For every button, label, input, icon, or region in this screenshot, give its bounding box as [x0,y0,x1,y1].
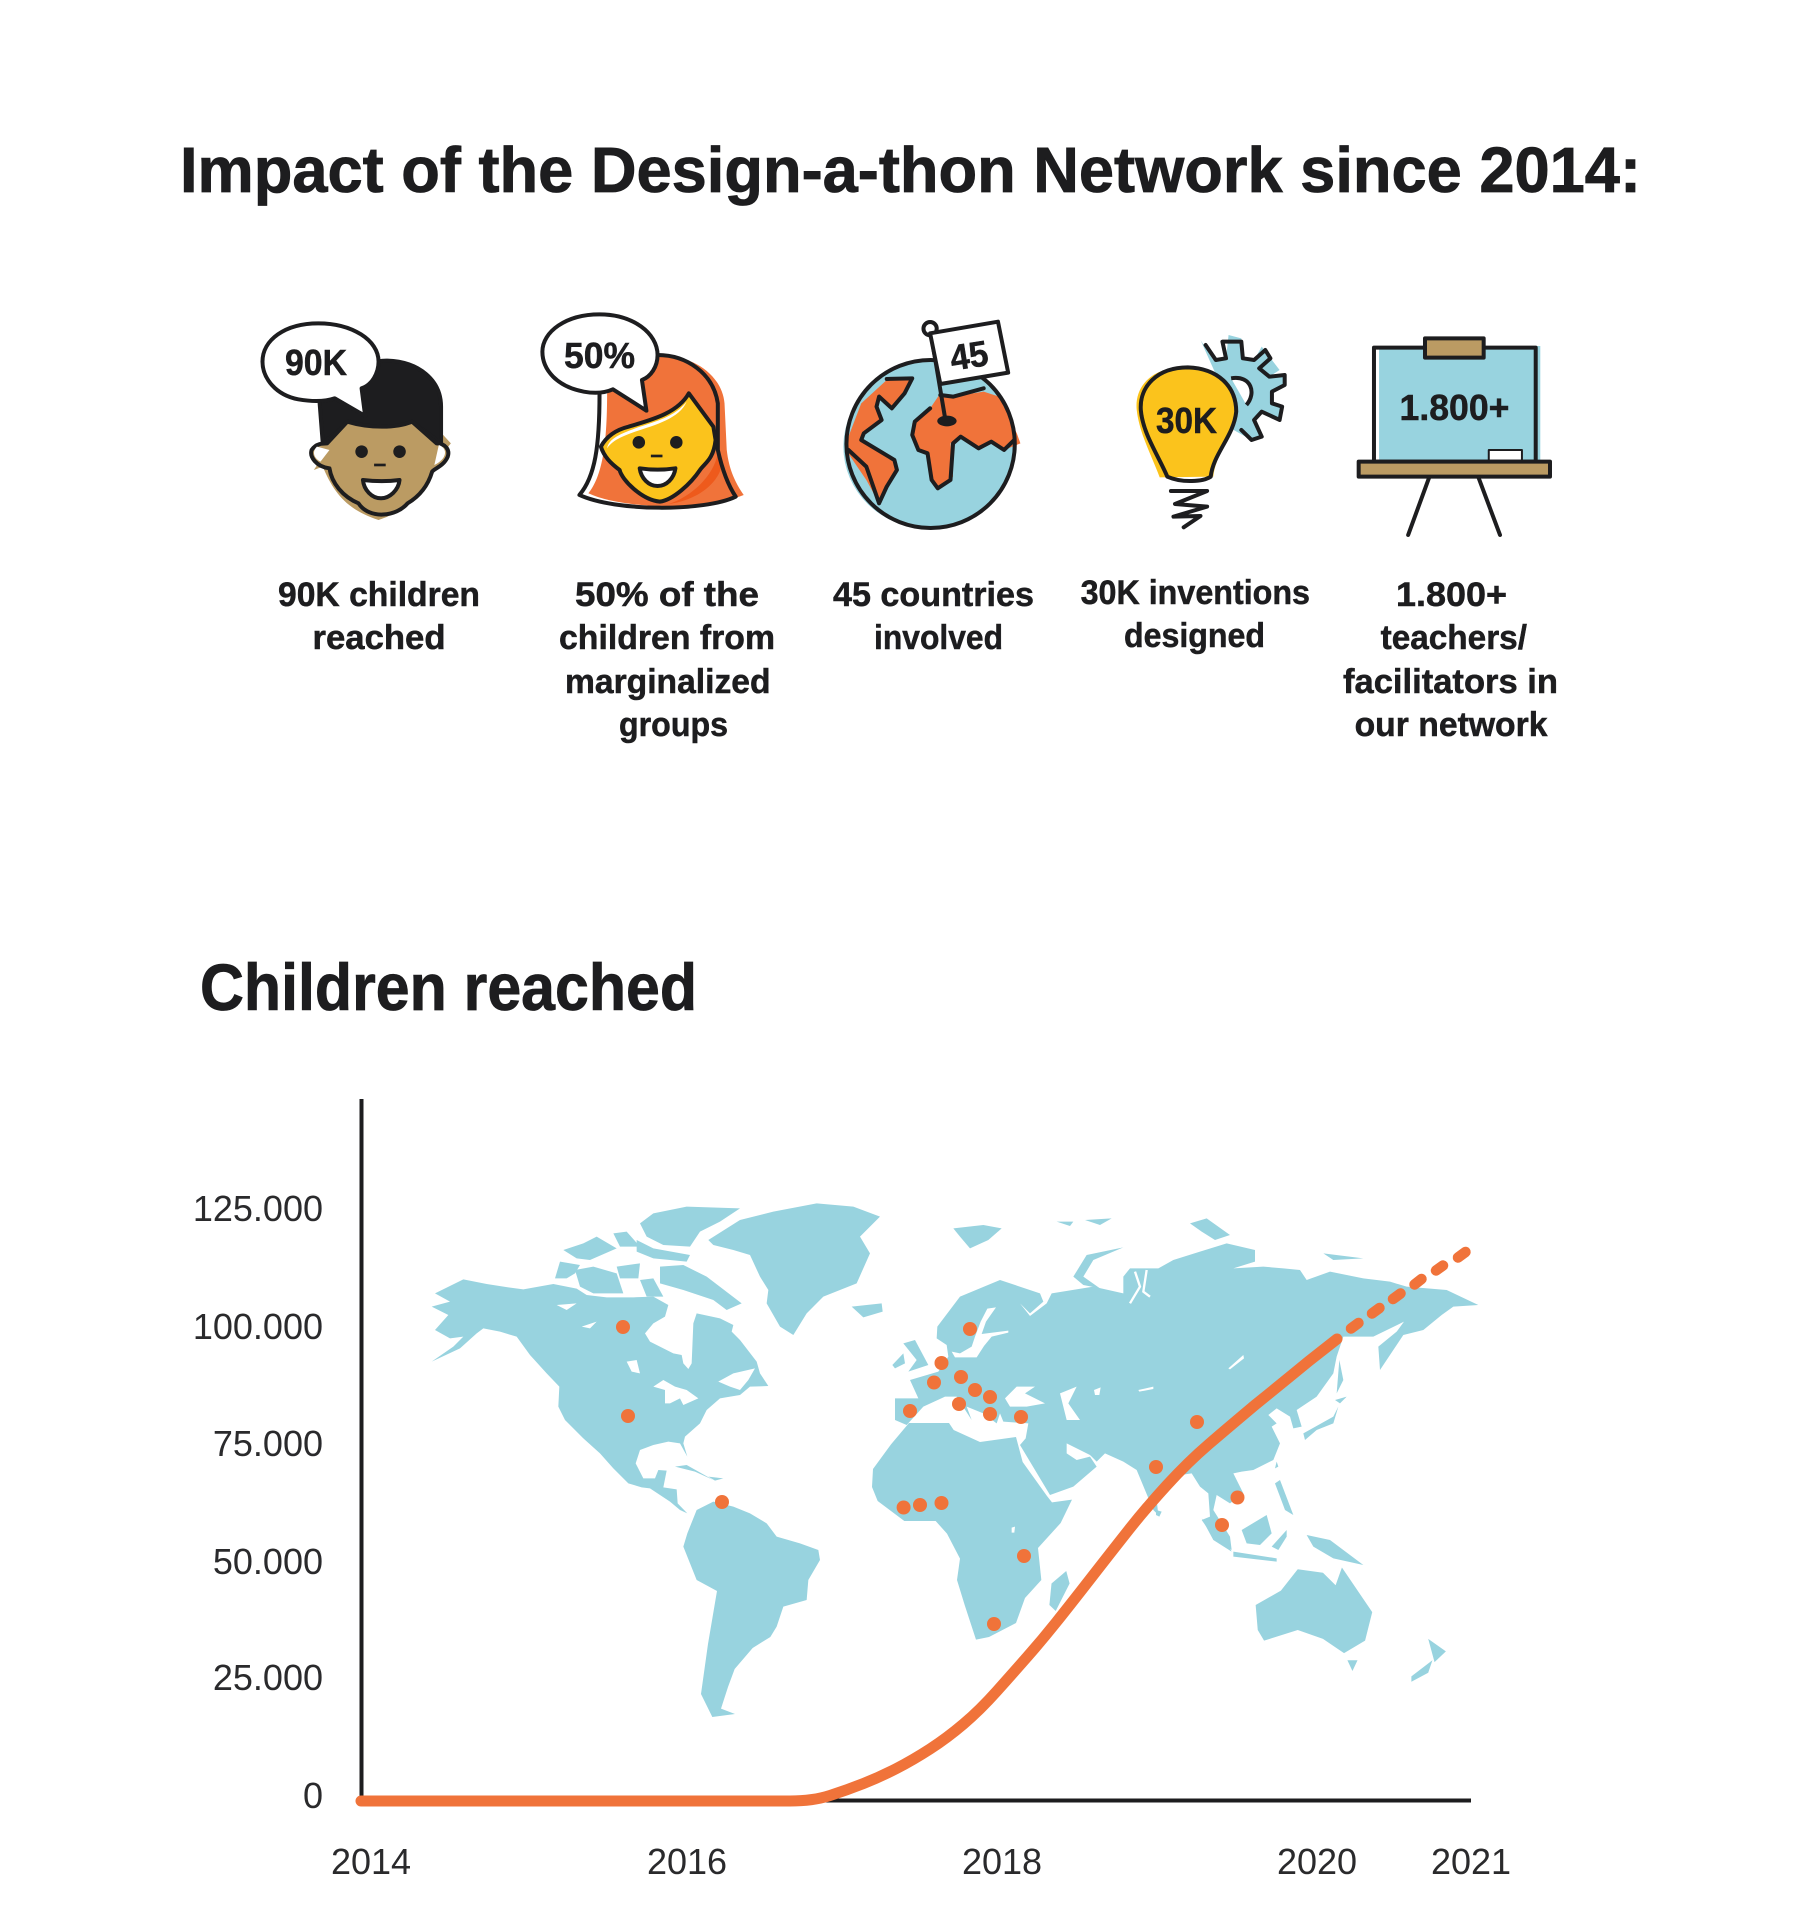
caption [1081,574,1310,655]
panel: 50% marginalized groups [542,314,775,744]
icon: girl with speech bubble [542,314,744,508]
map: Eurasia and Africa [872,1218,1478,1640]
caption: teachers/ [1381,619,1528,657]
caption [833,576,1034,657]
title: Impact of the Design-a-thon Network since 2014: [180,134,1641,206]
caption: 90K children [278,576,480,614]
caption: our network [1355,706,1548,744]
caption: involved [874,619,1003,657]
y axis labels: 75.000 [213,1423,323,1464]
heading: children reached: Children reached [200,950,697,1024]
x axis labels [331,1841,1511,1882]
chart axes [362,1099,1471,1800]
flag number: 45 [947,332,991,379]
bubble number: 90K [285,342,347,383]
panel: 90K children reached [262,323,480,657]
caption: groups [619,706,728,744]
forecast dashes [1351,1252,1466,1328]
caption: designed [1124,617,1265,655]
caption [1343,576,1558,744]
y axis labels: 0 [303,1775,323,1816]
x axis labels: 2020 [1277,1841,1357,1882]
caption: 30K inventions [1081,574,1310,612]
growth curve [361,1339,1337,1801]
caption: children from [559,619,775,657]
bubble number: 50% [564,335,635,376]
caption: facilitators in [1343,663,1558,701]
board number: 1.800+ [1400,387,1510,428]
panel: 45 countries [833,322,1034,657]
panel: 30K inventions [1081,335,1310,655]
bulb number: 30K [1156,400,1217,441]
y axis labels: 50.000 [213,1541,323,1582]
icon: boy with speech bubble [262,323,451,520]
caption: reached [312,619,446,657]
x axis labels: 2016 [647,1841,727,1882]
icon: blackboard on easel [1359,338,1550,535]
y axis labels: 125.000 [193,1188,323,1229]
caption [559,576,775,744]
y axis labels: 25.000 [213,1657,323,1698]
caption: 1.800+ [1396,576,1507,614]
y axis labels: 100.000 [193,1306,323,1347]
caption: 45 countries [833,576,1034,614]
line chart [193,1099,1511,1882]
caption: 50% of the [575,576,759,614]
map: Americas and Greenland [432,1203,883,1717]
x axis labels: 2014 [331,1841,411,1882]
map dots: countries [616,1320,1244,1631]
panel: 1.800+ teachers [1343,338,1558,744]
caption [278,576,480,657]
map: Madagascar, Australia, New Zealand [1049,1567,1446,1682]
icon: globe with flag [843,322,1020,528]
caption: marginalized [565,663,770,701]
y axis labels [193,1188,323,1816]
x axis labels: 2018 [962,1841,1042,1882]
world map [432,1203,1478,1717]
icon: lightbulb and gear [1136,335,1285,527]
x axis labels: 2021 [1431,1841,1511,1882]
